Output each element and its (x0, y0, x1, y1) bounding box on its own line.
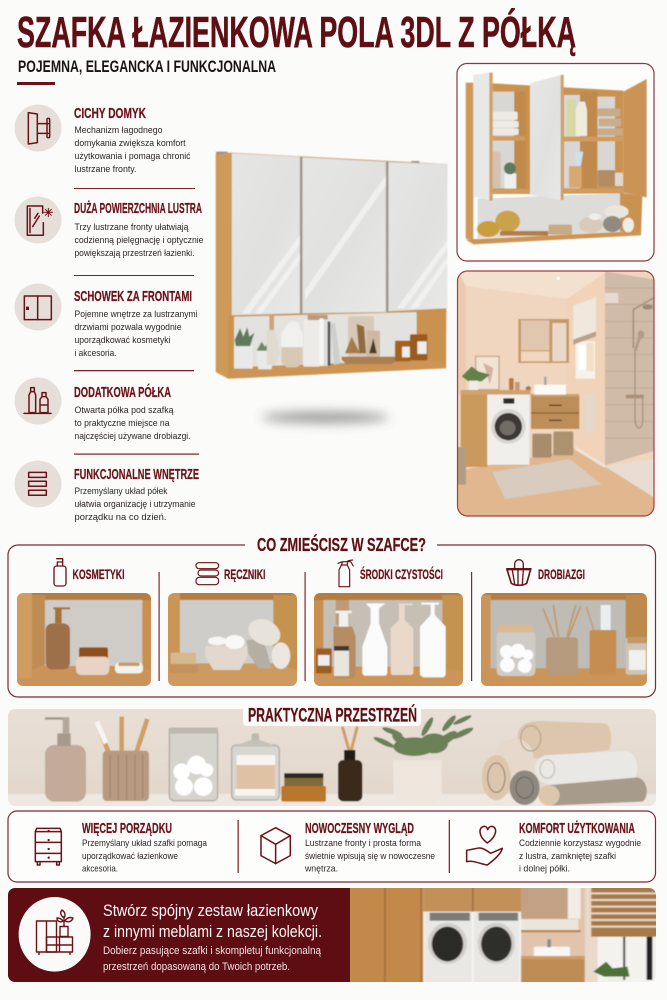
accessories right (338, 714, 647, 806)
label: RĘCZNIKI (224, 567, 266, 582)
text: akcesoria. (82, 864, 118, 874)
feature: funkcjonalne wnętrze (14, 460, 199, 522)
text (74, 309, 198, 358)
benefit: komfort użytkowania (467, 820, 641, 874)
text: Pojemne wnętrze za lustrzanymi (74, 309, 198, 319)
heading: SCHOWEK ZA FRONTAMI (74, 288, 192, 305)
text: Mechanizm łagodnego (74, 125, 162, 135)
heading: NOWOCZESNY WYGLĄD (305, 820, 414, 837)
text (74, 486, 196, 522)
panel: praktyczna przestrzeń photo strip (0, 700, 667, 810)
feature: cichy domyk (14, 104, 191, 174)
text: powiększają przestrzeń łazienki. (74, 248, 194, 258)
banner text: z innymi meblami z naszej kolekcji. (103, 922, 322, 941)
label: ŚRODKI CZYSTOŚCI (360, 567, 443, 582)
text: i dolnej półki. (519, 864, 570, 874)
banner text: Dobierz pasujące szafki i skompletuj funkcjonalną (103, 945, 322, 957)
heading: DODATKOWA PÓŁKA (74, 383, 171, 401)
text: i akcesoria. (74, 348, 116, 358)
text: Lustrzane fronty i prosta forma (305, 838, 422, 848)
text: uporządkować kosmetyki (74, 335, 170, 345)
text (74, 405, 190, 441)
heading: DUŻA POWIERZCHNIA LUSTRA (74, 200, 202, 217)
label: DROBIAZGI (538, 567, 585, 582)
column: środki czystości (311, 560, 467, 689)
icon: heart in hand (467, 826, 502, 865)
text: Codziennie korzystasz wygodnie (519, 838, 641, 848)
label: KOSMETYKI (72, 567, 124, 582)
text (74, 222, 204, 258)
column: drobiazgi (478, 560, 650, 689)
panel: open cabinet photo (457, 64, 654, 261)
icon: bottles on shelf (14, 378, 62, 424)
icon: basket (506, 560, 531, 585)
text (82, 838, 208, 874)
feature: schowek za frontami (14, 284, 198, 358)
text: codzienną pielęgnację i optycznie (74, 235, 204, 245)
panel: bathroom photo (455, 268, 667, 521)
panel: benefits (8, 811, 656, 882)
feature: dodatkowa półka (14, 378, 190, 441)
text: lustrzane fronty. (74, 164, 136, 174)
text (74, 125, 191, 174)
column: ręczniki (165, 563, 300, 689)
text: drzwiami pozwala wygodnie (74, 322, 182, 332)
banner text: Stwórz spójny zestaw łazienkowy (103, 901, 318, 920)
photo: cleaning products on shelf (314, 593, 463, 686)
section heading: CO ZMIEŚCISZ W SZAFCE? (257, 534, 426, 555)
accessories left (45, 717, 326, 802)
icon: hinge (14, 104, 62, 152)
panel: co zmieścisz w szafce (8, 534, 656, 697)
icon: furniture set (19, 897, 91, 972)
text: Otwarta półka pod szafką (74, 405, 174, 415)
photo: bathroom accessories (8, 709, 656, 806)
icon: cabinet doors (14, 284, 62, 330)
text: świetnie wpisują się w nowoczesne (305, 851, 435, 861)
benefit: więcej porządku (35, 820, 208, 874)
text: domykania zwiększa komfort (74, 138, 186, 148)
text: Trzy lustrzane fronty ułatwiają (74, 222, 189, 232)
text: najczęściej używane drobiazgi. (74, 431, 190, 441)
banner text (103, 901, 322, 973)
icon: bottle (54, 559, 66, 586)
photo: towels on shelf (168, 593, 297, 686)
icon: towels (196, 563, 219, 585)
banner: zestaw łazienkowy (8, 885, 661, 985)
photo: bathroom interior (458, 272, 654, 516)
photo: open cabinet (466, 73, 647, 244)
text (304, 838, 435, 874)
text: uporządkować łazienkowe (82, 851, 178, 861)
icon: drawer unit (35, 828, 61, 865)
heading: WIĘCEJ PORZĄDKU (82, 820, 172, 837)
subtitle: POJEMNA, ELEGANCKA I FUNKCJONALNA (18, 58, 276, 76)
icon: drawers (14, 460, 62, 508)
text: porządku na co dzień. (74, 512, 166, 522)
text: to praktyczne miejsce na (74, 418, 170, 428)
heading tab: PRAKTYCZNA PRZESTRZEŃ (248, 704, 417, 726)
photo: cosmetics on shelf (17, 593, 151, 686)
text: z lustra, zamkniętej szafki (519, 851, 616, 861)
heading: FUNKCJONALNE WNĘTRZE (74, 466, 199, 483)
photo: small items on shelf (478, 590, 650, 689)
icon: cube (261, 828, 290, 864)
feature: duża powierzchnia lustra (14, 196, 204, 258)
text: Przemyślany układ półek (74, 486, 168, 496)
text: Przemyślany układ szafki pomaga (82, 838, 208, 848)
column: kosmetyki (13, 559, 154, 689)
heading tab (243, 703, 421, 726)
heading: CICHY DOMYK (74, 105, 146, 122)
benefit: nowoczesny wygląd (261, 820, 435, 874)
text: ułatwia organizację i utrzymanie (74, 499, 196, 509)
icon: mirror (14, 196, 62, 244)
product photo: closed cabinet (216, 152, 447, 423)
photo: laundry and bathroom (8, 885, 661, 985)
text (519, 838, 641, 874)
icon: spray bottle (338, 560, 353, 587)
banner text: przestrzeń dopasowaną do Twoich potrzeb. (103, 961, 290, 973)
text: użytkowania i pomaga chronić (74, 151, 191, 161)
text: wnętrza. (304, 864, 338, 874)
